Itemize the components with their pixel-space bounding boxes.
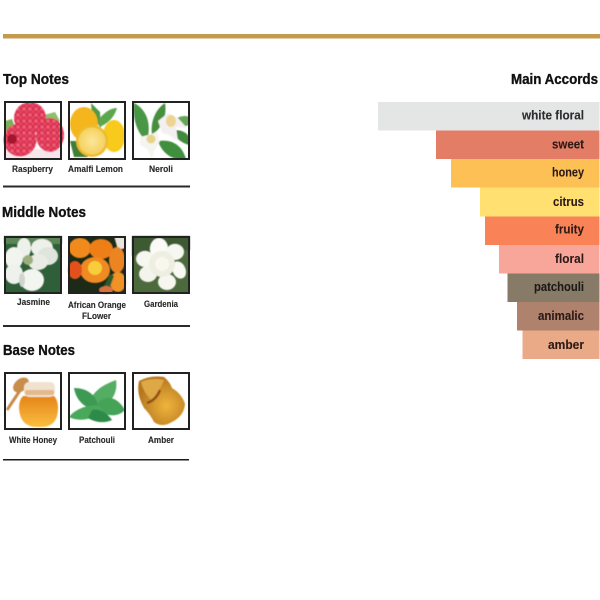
icon: african orange flower [68,236,126,294]
bar: floral: floral [555,251,584,266]
icon: neroli [132,101,190,160]
panel: middle notes: FLower [82,311,111,321]
icon: amalfi lemon [68,101,126,160]
bar: citrus: citrus [553,194,584,209]
bar: amber: amber [548,337,584,352]
gold top rule [3,34,600,38]
panel: main accords [378,71,600,359]
heading: middle notes: Middle Notes [2,204,86,221]
bar: sweet [436,130,600,159]
label: gardenia: Gardenia [144,299,179,309]
panel: base notes [3,342,190,445]
icon: gardenia [132,236,190,294]
bar: amber [522,330,600,359]
bar: fruity [485,216,600,245]
heading: base notes: Base Notes [3,342,75,359]
bar: patchouli [508,274,600,302]
bar: honey: honey [552,164,585,180]
panel: middle notes [2,204,190,321]
bar: fruity: fruity [555,222,585,236]
bar: sweet: sweet [552,136,585,152]
label: white honey: White Honey [9,435,57,445]
bar: patchouli: patchouli [534,279,584,294]
bar: floral [499,245,600,274]
label: patchouli: Patchouli [79,435,115,445]
icon: amber [132,372,190,430]
bar: animalic [517,302,600,330]
label: african orange flower: African Orange [68,300,126,310]
bar: white floral [378,102,600,130]
heading: top notes: Top Notes [3,71,69,88]
label: amalfi lemon: Amalfi Lemon [68,164,123,174]
label: jasmine: Jasmine [17,297,50,307]
bar: white floral: white floral [521,108,584,122]
icon: patchouli [68,372,126,430]
icon: white honey [4,372,62,430]
bar: animalic: animalic [538,308,584,323]
bar: citrus [480,188,600,216]
label: raspberry: Raspberry [12,164,53,174]
icon: raspberry [4,101,64,160]
panel: top notes [3,71,190,174]
label: amber: Amber [148,435,174,445]
icon: jasmine [4,236,62,294]
bar: honey [451,159,600,188]
label: neroli: Neroli [149,164,173,174]
